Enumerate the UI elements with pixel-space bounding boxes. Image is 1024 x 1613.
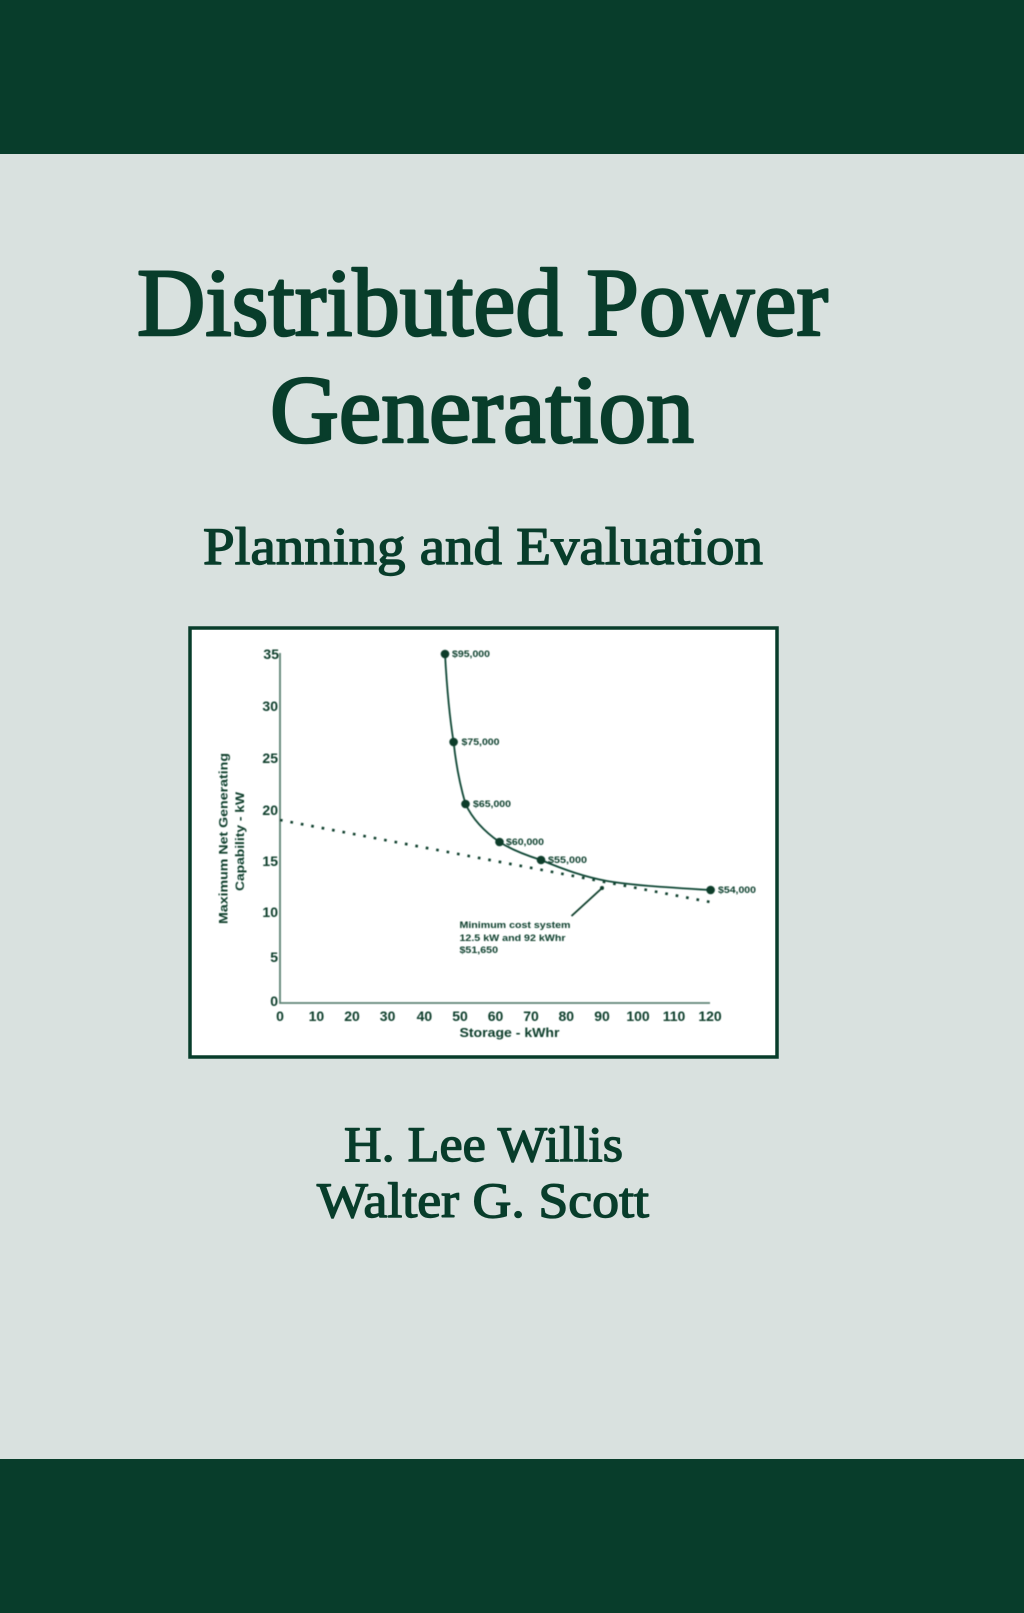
chart panel	[190, 628, 777, 1057]
y axis tick labels: 0	[270, 993, 278, 1009]
callout: minimum cost system: 12.5 kW and 92 kWhr	[460, 933, 566, 944]
data point labels: $54,000	[718, 885, 756, 896]
data point labels: $75,000	[462, 737, 500, 748]
authors: Walter G. Scott	[317, 1172, 649, 1228]
y axis tick labels: 30	[262, 698, 278, 714]
x axis tick labels: 30	[380, 1008, 396, 1024]
x axis tick labels: 110	[663, 1008, 686, 1024]
chart plot	[216, 646, 756, 1040]
cost curve	[445, 654, 710, 890]
chart frame	[190, 628, 777, 1057]
x axis title: Storage - kWhr	[460, 1026, 560, 1040]
callout arrow	[572, 886, 604, 916]
callout: minimum cost system: $51,650	[460, 945, 498, 956]
dotted tangent line	[280, 820, 710, 902]
x axis tick labels: 100	[626, 1008, 650, 1024]
title: Generation	[270, 356, 694, 463]
data point labels: $55,000	[548, 855, 587, 866]
x axis tick labels: 0	[276, 1008, 284, 1024]
title	[137, 249, 828, 463]
y axis title: Capability - kW	[233, 791, 247, 891]
x axis tick labels: 10	[309, 1008, 324, 1024]
x axis tick labels: 90	[594, 1008, 610, 1024]
data point labels	[452, 649, 756, 896]
data point labels: $95,000	[452, 649, 490, 660]
authors	[317, 1116, 649, 1228]
y axis tick labels: 10	[262, 904, 278, 920]
y axis title	[216, 753, 247, 924]
y axis tick labels	[262, 646, 279, 1009]
bottom band	[0, 1459, 1024, 1613]
y axis tick labels: 15	[262, 853, 278, 869]
axes	[280, 653, 710, 1003]
callout: minimum cost system: Minimum cost system	[460, 920, 570, 931]
y axis tick labels: 25	[262, 750, 278, 766]
x axis tick labels	[276, 1008, 722, 1024]
x axis tick labels: 80	[559, 1008, 574, 1024]
y axis tick labels: 20	[262, 802, 278, 818]
data point labels: $65,000	[473, 799, 511, 810]
x axis tick labels: 70	[523, 1008, 539, 1024]
y axis title: Maximum Net Generating	[216, 753, 230, 924]
y axis tick labels: 5	[270, 949, 278, 965]
subtitle: Planning and Evaluation	[203, 518, 763, 576]
x axis tick labels: 50	[452, 1008, 468, 1024]
authors: H. Lee Willis	[344, 1116, 623, 1172]
x axis tick labels: 60	[488, 1008, 503, 1024]
title: Distributed Power	[137, 249, 828, 356]
x axis tick labels: 40	[417, 1008, 432, 1024]
data point labels: $60,000	[506, 837, 544, 848]
x axis tick labels: 120	[698, 1008, 722, 1024]
x axis tick labels: 20	[344, 1008, 360, 1024]
data points	[441, 650, 715, 894]
y axis tick labels: 35	[263, 646, 279, 662]
callout: minimum cost system	[460, 920, 570, 956]
top band	[0, 0, 1024, 154]
